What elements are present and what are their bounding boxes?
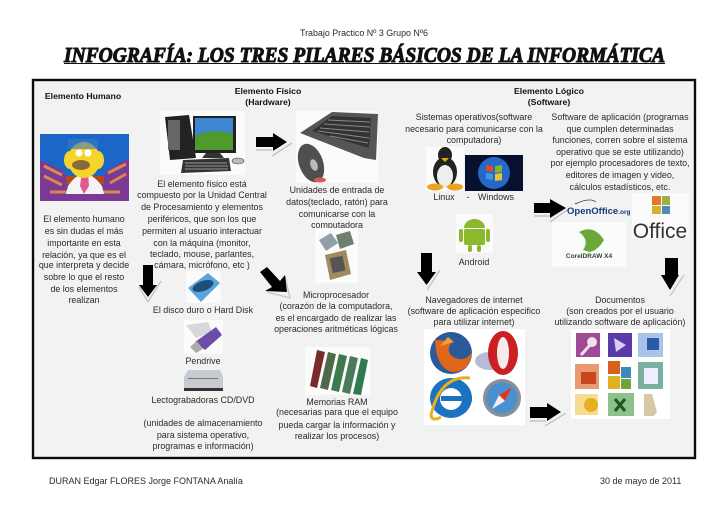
header line: Trabajo Practico Nº 3 Grupo Nº6 [300, 28, 428, 38]
text: software de aplicacion: cálculos estadísticos, etc. [570, 182, 670, 192]
text: memorias ram [276, 397, 398, 441]
text: documentos: Documentos [595, 295, 645, 305]
text: human: es sin dudas el más [45, 226, 124, 236]
text: fisico: compuesto por la Unidad Central [137, 190, 267, 200]
text: navegadores [408, 295, 540, 327]
text: documentos [555, 295, 685, 327]
text: software de aplicacion: Software de aplicación (programas [551, 112, 689, 122]
text: human: realizan [68, 295, 100, 305]
text: entrada: datos(teclado, ratón) para [286, 197, 388, 207]
footer: authors: DURAN Edgar FLORES Jorge FONTANA Analía [49, 476, 243, 486]
icon: hard disk [186, 271, 221, 303]
arrow: browsers to documents [530, 403, 566, 426]
arrow: computer to keyboard [256, 133, 292, 156]
text: navegadores: (software de aplicación especifico [408, 306, 540, 316]
text: almacenamiento: programas e información) [152, 441, 254, 451]
text: fisico: cámara, micrófono, etc ) [154, 260, 250, 270]
arrow: down to documents [661, 258, 684, 296]
label: linux windows: Windows [478, 192, 515, 202]
arrow: down to disk [139, 265, 161, 302]
heading: elemento fisico [235, 86, 301, 107]
logo: openoffice: OpenOffice.org [567, 206, 631, 217]
icon: homer [40, 134, 129, 201]
text: microprocesador: Microprocesador [303, 290, 369, 300]
text: sistemas operativos [405, 112, 543, 145]
text: entrada [286, 185, 388, 230]
text: fisico: permiten al usuario interactuar [142, 226, 262, 236]
logo: coreldraw: CorelDRAW X4 [566, 253, 612, 260]
text: memorias ram: realizar los procesos) [295, 431, 379, 441]
icon: desktop computer [160, 111, 245, 175]
heading: elemento logico: Elemento Lógico [514, 86, 584, 96]
logo: microsoft office: Office [633, 220, 687, 243]
logo: openoffice [567, 200, 631, 217]
text: sistemas operativos: computadora) [447, 135, 501, 145]
text: human: sobre lo que el resto [44, 272, 124, 282]
arrow: to applications [534, 199, 570, 222]
icon: internet explorer [430, 378, 472, 419]
text: entrada: Unidades de entrada de [290, 185, 384, 195]
text: entrada: comunicarse con la [299, 209, 375, 219]
main panel [33, 80, 695, 458]
heading: elemento humano: Elemento Humano [45, 91, 121, 101]
text: fisico: de Procesamiento y elementos [141, 202, 263, 212]
text: microprocesador [274, 290, 398, 334]
text: almacenamiento [144, 418, 263, 451]
text: software de aplicacion: funciones, corren sobre el sistema [552, 135, 688, 145]
text: human: de los elementos [50, 284, 118, 294]
text: documentos: utilizando software de aplicación) [555, 317, 685, 327]
text: software de aplicacion [550, 112, 690, 192]
text: software de aplicacion: por ejemplo procesadores de texto, [550, 158, 690, 168]
text: memorias ram: (necesarias para que el equipo [276, 407, 398, 417]
text: human: importante en esta [47, 238, 121, 248]
text: memorias ram: Memorias RAM [306, 397, 368, 407]
icon: linux [426, 147, 464, 191]
icon: keyboard and mouse [293, 111, 378, 186]
icon: android [456, 214, 493, 253]
icon: safari [483, 379, 521, 417]
icon: ram [305, 347, 370, 395]
text: human: que interpreta y decide [39, 260, 129, 270]
label: dvd drive: Lectograbadoras CD/DVD [151, 395, 255, 405]
text: software de aplicacion: que cumplen determinadas [566, 124, 674, 134]
icons: web browsers [424, 329, 525, 425]
text: human: relación, ya que es el [42, 250, 126, 260]
text: sistemas operativos: Sistemas operativos(software [416, 112, 532, 122]
icon: windows [465, 155, 523, 191]
footer: date: 30 de mayo de 2011 [600, 476, 681, 486]
logo: coreldraw [552, 222, 626, 267]
icons: office documents [571, 329, 670, 419]
arrow: down to browsers [417, 253, 440, 290]
text: microprocesador: operaciones aritméticas lógicas [274, 324, 398, 334]
heading: elemento logico: (Software) [528, 97, 570, 107]
icon: opera [475, 331, 518, 375]
text: fisico: El elemento físico está [157, 179, 247, 189]
icon: dvd drive [184, 370, 223, 391]
text: entrada: computadora [311, 220, 363, 230]
text: almacenamiento: para sistema operativo, [157, 430, 249, 440]
text: fisico: teclado, mouse, parlantes, [150, 249, 254, 259]
heading: elemento logico [514, 86, 584, 107]
text: documentos: (son creados por el usuario [566, 306, 674, 316]
text: microprocesador: (corazón de la computadora, [280, 301, 392, 311]
text: navegadores: para utilizar internet) [434, 317, 514, 327]
text: fisico: periféricos, que son los que [148, 214, 256, 224]
text: human: El elemento humano [43, 214, 125, 224]
text: fisico [137, 179, 267, 270]
text: microprocesador: es el encargado de realizar las [276, 313, 397, 323]
text: sistemas operativos: necesario para comunicarse con la [405, 124, 543, 134]
label: hard disk: El disco duro o Hard Disk [153, 305, 254, 315]
arrow: diagonal to processor [260, 267, 290, 298]
text: software de aplicacion: operativo que se este utilizando) [556, 147, 684, 157]
text: navegadores: Navegadores de internet [425, 295, 523, 305]
title: INFOGRAFÍA: LOS TRES PILARES BÁSICOS DE LA INFORMÁTICA [63, 43, 665, 67]
icon: pendrive [184, 320, 223, 354]
heading: elemento fisico: Elemento Físico [235, 86, 301, 96]
text: almacenamiento: (unidades de almacenamiento [144, 418, 263, 428]
label: linux windows: Linux [433, 192, 455, 202]
heading: elemento fisico: (Hardware) [245, 97, 291, 107]
label: linux windows [433, 192, 515, 202]
logo: microsoft office [632, 193, 689, 243]
text: fisico: con la máquina (monitor, [153, 238, 251, 248]
label: pendrive: Pendrive [185, 356, 221, 366]
text: human [39, 214, 129, 305]
text: software de aplicacion: editores de imagen y video, [566, 170, 674, 180]
icon: firefox [430, 332, 472, 374]
text: memorias ram: pueda cargar la información y [279, 420, 396, 430]
icon: processors [315, 228, 358, 283]
label: linux windows: - [467, 192, 470, 202]
label: android: Android [459, 257, 489, 267]
